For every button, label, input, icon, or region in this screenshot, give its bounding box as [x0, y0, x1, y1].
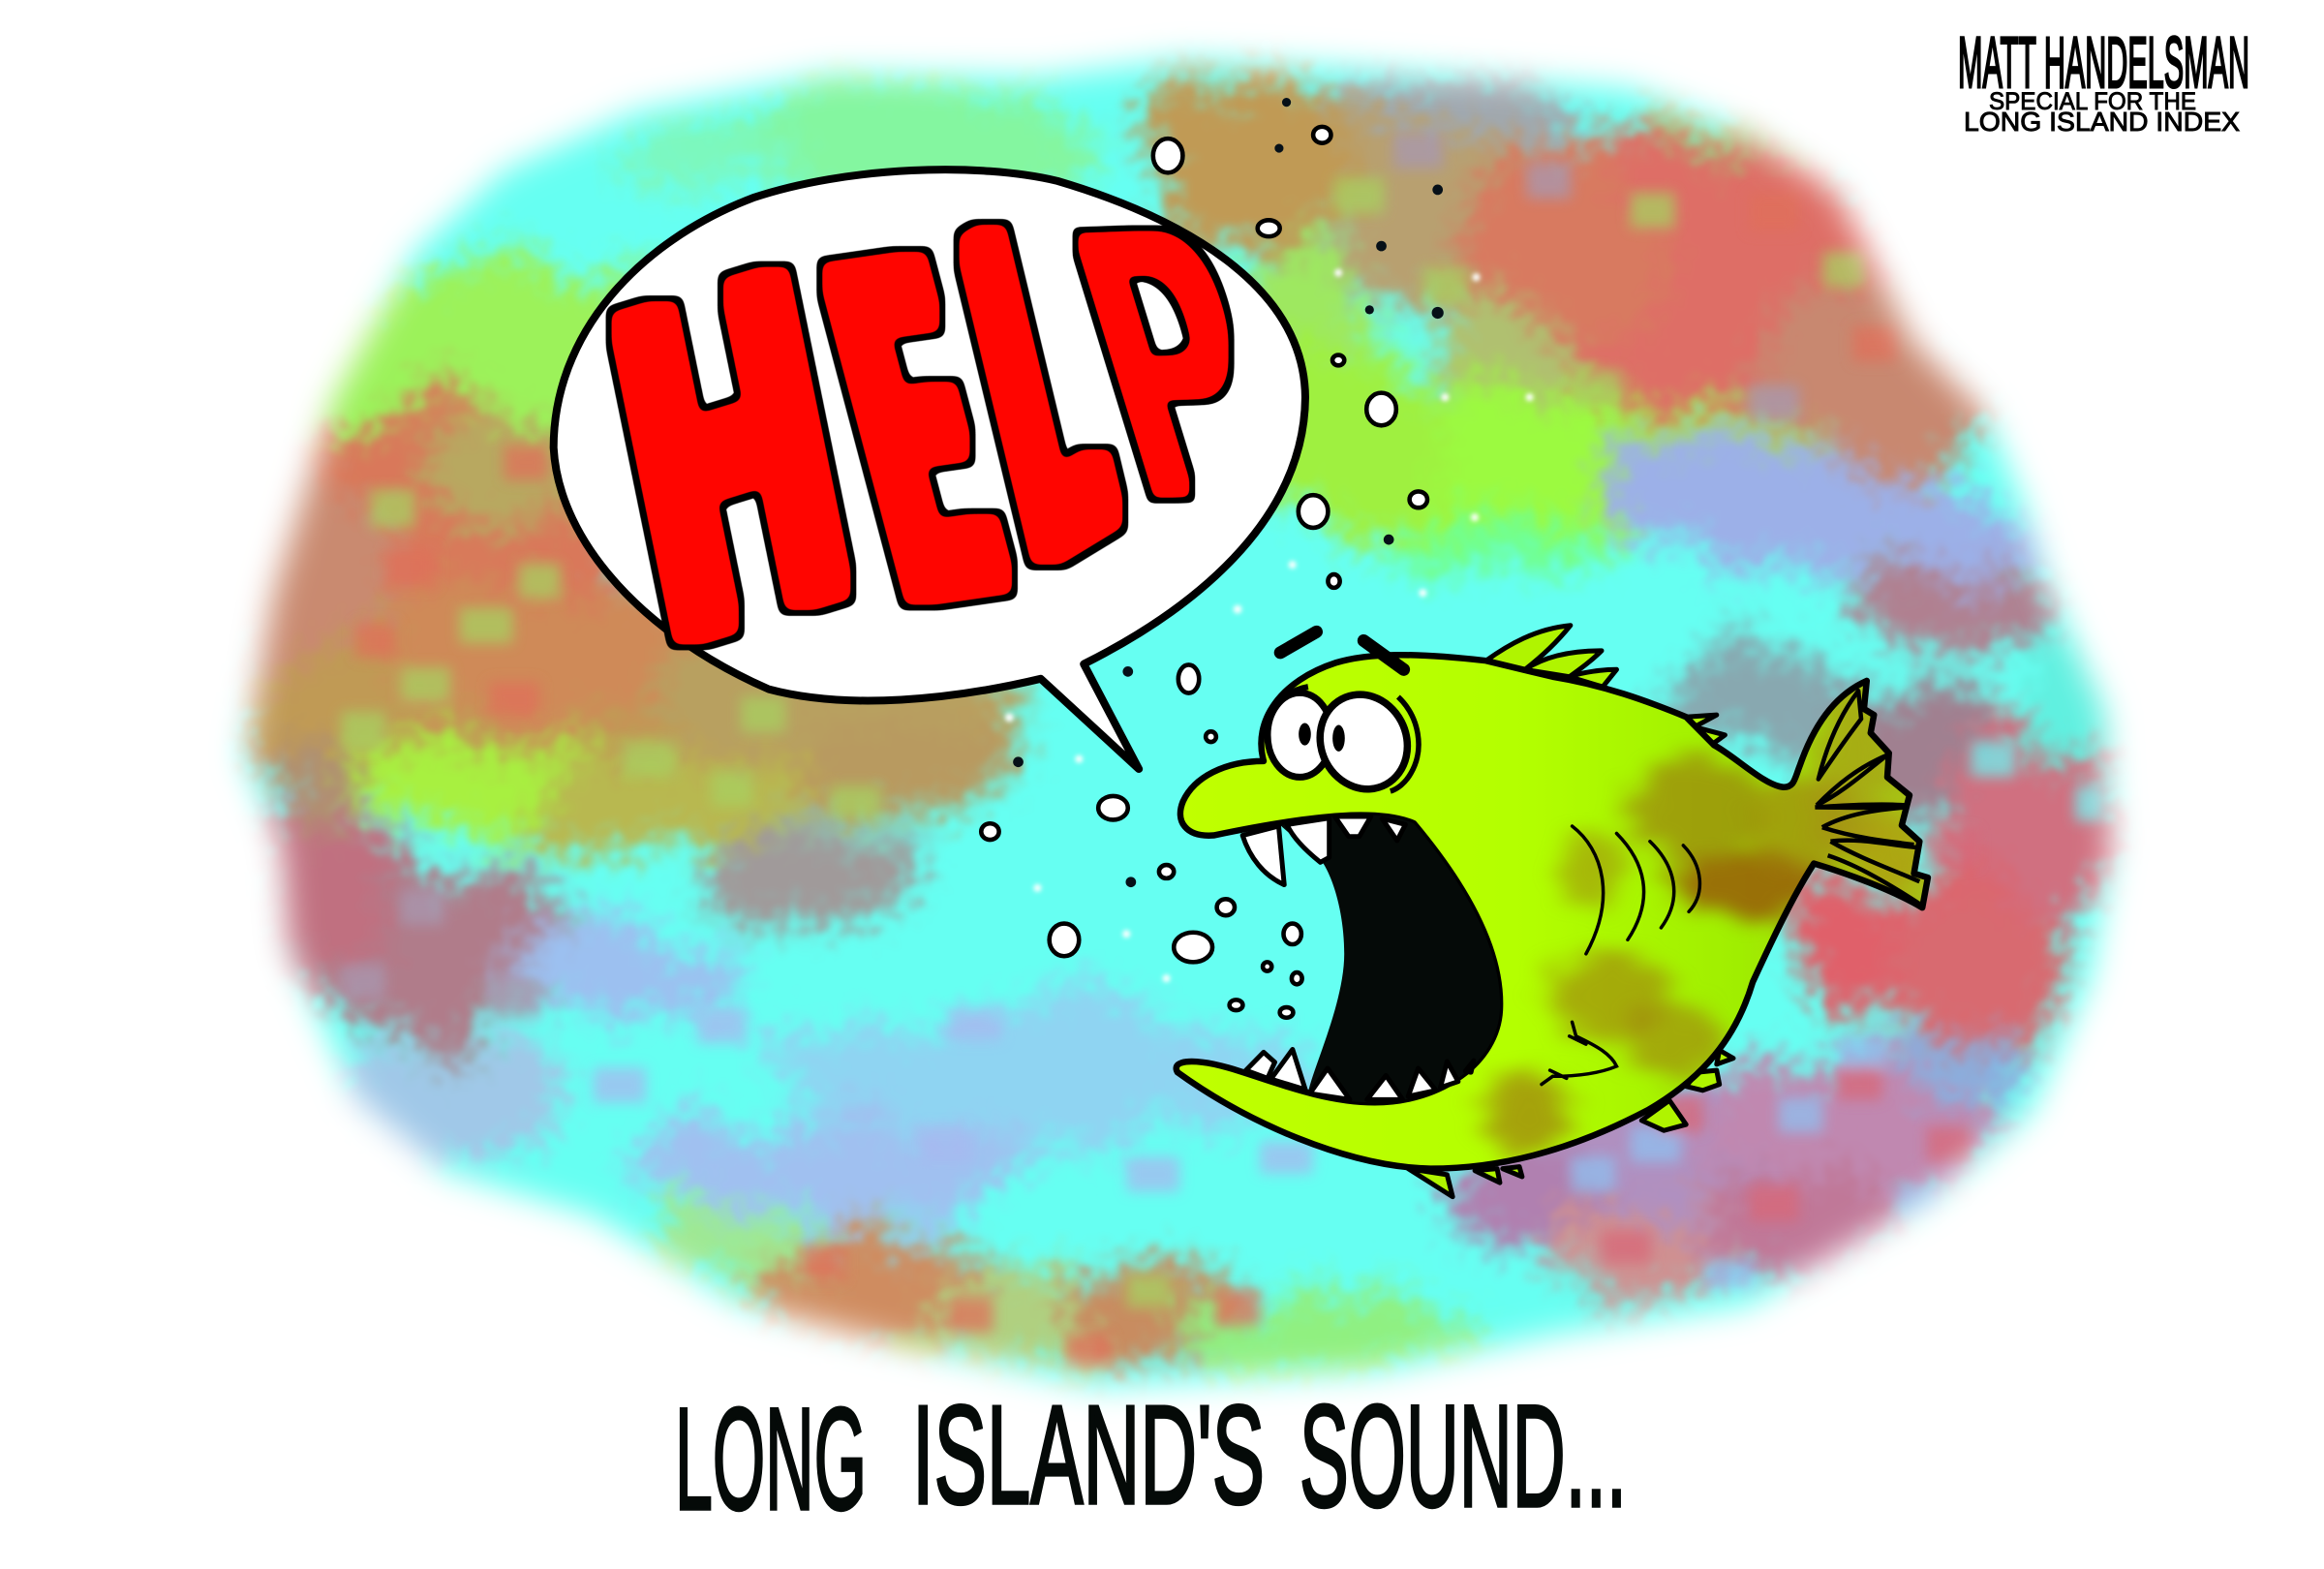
fish tail rays [1815, 691, 1922, 906]
caption: LONG ISLAND'S SOUND... [675, 1374, 1627, 1540]
fish outline [1177, 655, 1928, 1169]
black specks in the water [1013, 98, 1444, 887]
fish eyebrows [1280, 631, 1404, 669]
speech bubble word: HELP: P [1048, 162, 1300, 567]
speech bubble word: HELP: L [943, 115, 1134, 648]
fish open mouth [1280, 815, 1500, 1102]
air bubbles [981, 127, 1427, 1018]
fish pectoral fin [1542, 1022, 1616, 1085]
caption: LONG ISLAND'S SOUND...: LONG [675, 1377, 867, 1540]
artist signature: LONG ISLAND INDEX [1964, 107, 2240, 137]
artist signature [1958, 22, 2249, 137]
fish dorsal and belly fins [1408, 626, 1733, 1197]
fish gill lines [1573, 826, 1699, 954]
speech bubble word: HELP: E [802, 168, 1028, 690]
fish teeth [1242, 816, 1474, 1099]
speech bubble word: HELP [590, 115, 1300, 729]
speech bubble word: HELP: H [590, 180, 872, 729]
caption: LONG ISLAND'S SOUND...: ISLAND'S [912, 1376, 1265, 1533]
polluted water blob background [223, 36, 2134, 1409]
artist signature: SPECIAL FOR THE [1989, 88, 2196, 115]
fish body [1177, 655, 1928, 1169]
caption: LONG ISLAND'S SOUND...: SOUND... [1300, 1374, 1627, 1537]
oil stains on fish [1488, 685, 1919, 1158]
fish eyes [1265, 687, 1419, 792]
white glints in the water [1005, 269, 1534, 982]
speech bubble outline [554, 169, 1305, 769]
mottled colour speckle in the water [341, 134, 2104, 1367]
fish [1177, 626, 1928, 1197]
